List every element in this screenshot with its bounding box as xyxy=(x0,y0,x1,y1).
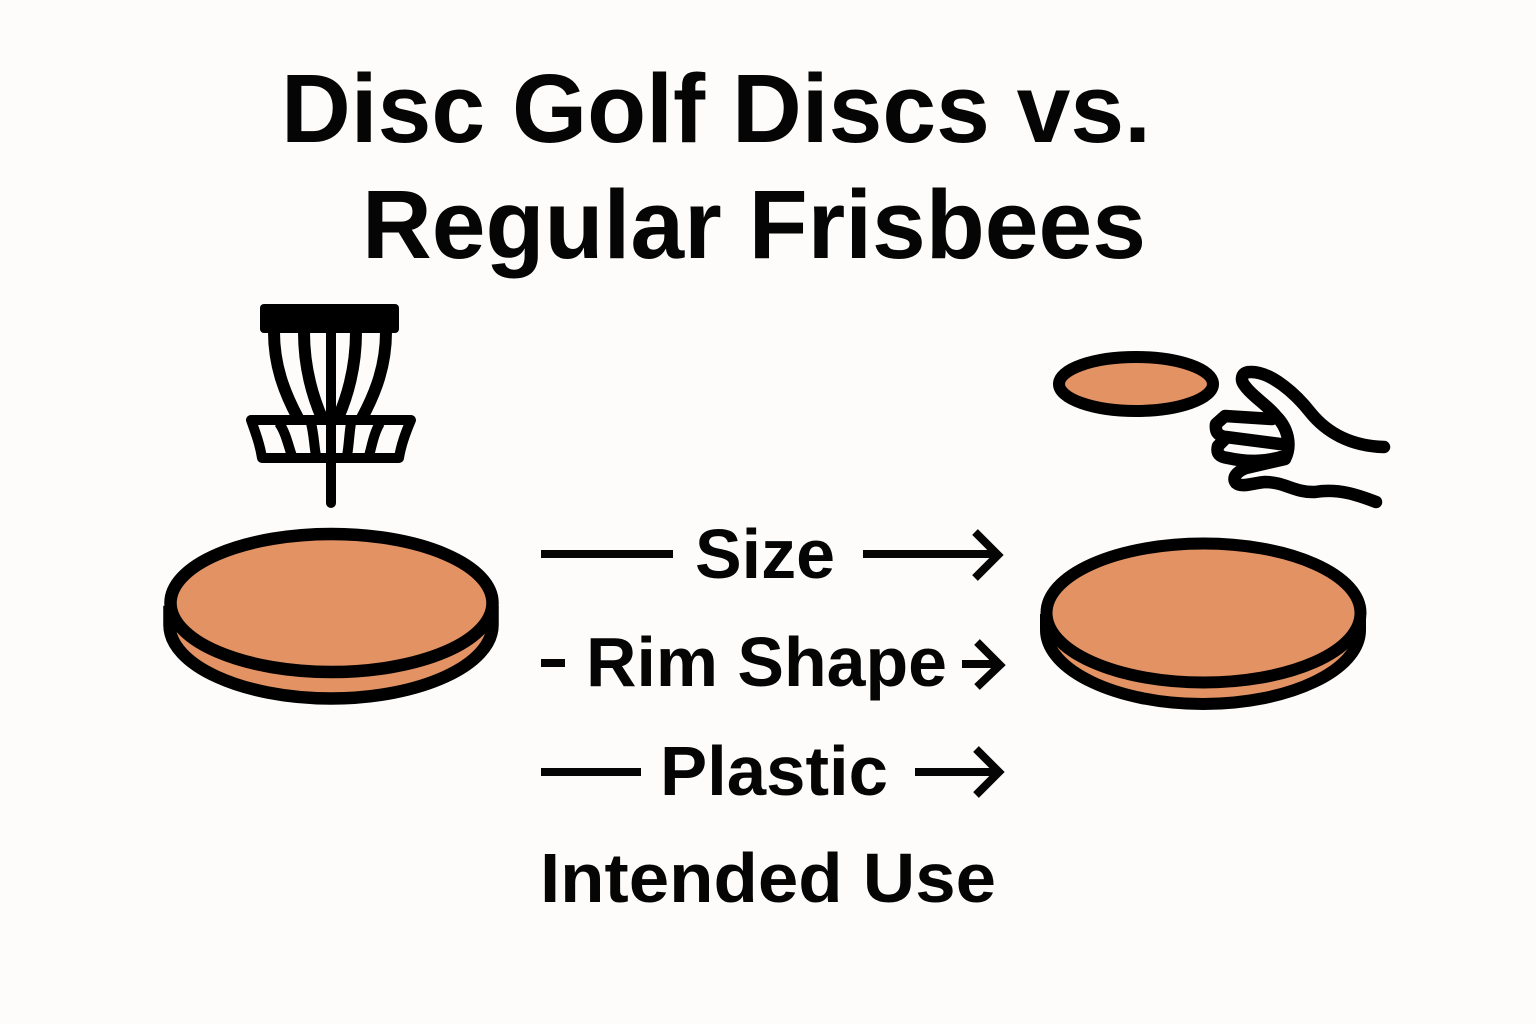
icon: disc golf disc xyxy=(170,534,492,698)
title: Disc Golf Discs vs. xyxy=(281,54,1151,163)
icon: disc golf basket xyxy=(251,304,411,503)
icon: throwing hand xyxy=(1216,372,1384,502)
title: Regular Frisbees xyxy=(362,170,1146,279)
comparison row: plastic: Plastic xyxy=(660,732,888,810)
comparison row: plastic xyxy=(541,732,999,810)
comparison row: size: Size xyxy=(695,515,835,593)
comparison row: size xyxy=(541,515,998,593)
comparison row: rim shape: Rim Shape xyxy=(586,623,947,701)
title xyxy=(281,54,1151,279)
comparison row: intended use: Intended Use xyxy=(540,839,996,917)
icon: flying frisbee xyxy=(1059,357,1213,411)
icon: regular frisbee xyxy=(1046,544,1360,704)
